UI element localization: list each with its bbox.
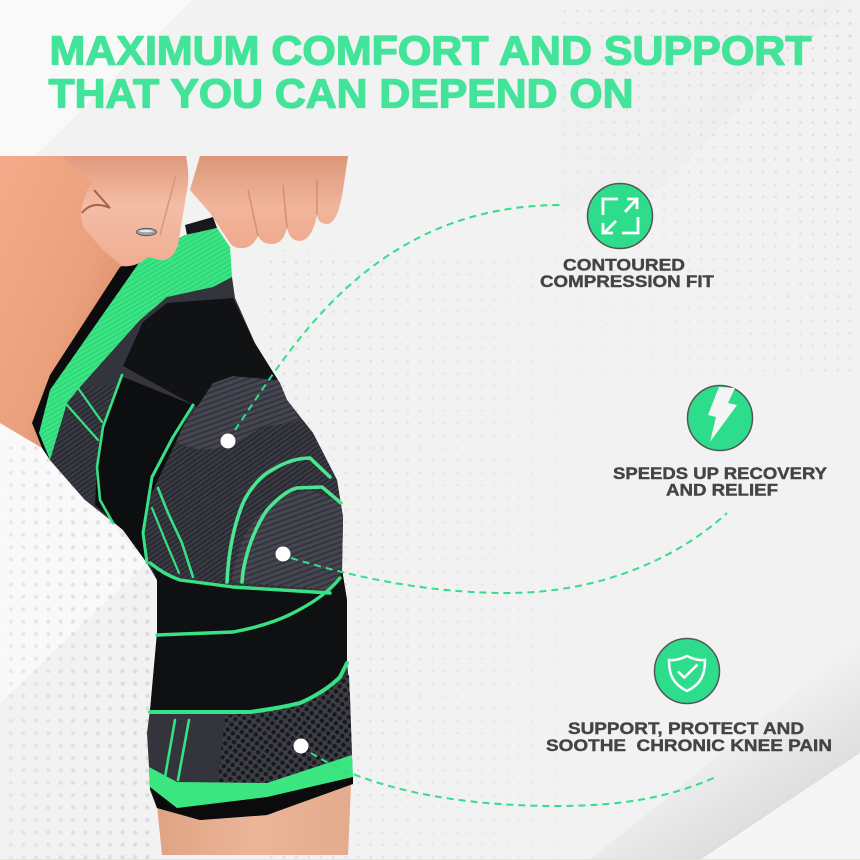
calf skin bbox=[157, 785, 351, 855]
black edge at top of cuff bbox=[185, 217, 217, 235]
photo: knee brace on leg bbox=[0, 156, 360, 855]
green bottom cuff bbox=[149, 755, 353, 808]
dashed connector: recovery bbox=[291, 513, 727, 593]
label: SPEEDS UP RECOVERY bbox=[613, 465, 827, 483]
striped knee lower bbox=[232, 490, 345, 590]
striped knee top bbox=[173, 376, 300, 450]
ring bbox=[136, 228, 156, 236]
marker dots bbox=[220, 434, 308, 754]
black compression wrap bbox=[150, 563, 347, 712]
label: COMPRESSION FIT bbox=[540, 273, 714, 291]
dashed connector: support bbox=[311, 753, 718, 806]
icon: shield check bbox=[654, 638, 720, 704]
icon: expand arrows bbox=[588, 184, 652, 248]
brace body bbox=[39, 257, 353, 820]
right hand bbox=[190, 156, 348, 248]
dashed connector: compression fit bbox=[235, 205, 562, 430]
left hand bbox=[62, 156, 188, 266]
title: THAT YOU CAN DEPEND ON bbox=[48, 70, 634, 116]
thigh skin bbox=[0, 156, 123, 448]
left side knit bbox=[50, 385, 115, 500]
title: MAXIMUM COMFORT AND SUPPORT bbox=[50, 28, 812, 74]
feature: contoured compression fit bbox=[540, 184, 714, 291]
label: SUPPORT, PROTECT AND bbox=[568, 720, 804, 738]
icon: lightning bolt bbox=[688, 386, 752, 450]
black vertical strap bbox=[95, 377, 193, 563]
bottom black hem bbox=[150, 777, 353, 820]
label: AND RELIEF bbox=[666, 482, 778, 500]
black inner flap bbox=[123, 298, 278, 407]
green straps and lines bbox=[67, 375, 347, 780]
label: CONTOURED bbox=[563, 256, 685, 274]
feature: support and protect bbox=[546, 638, 832, 755]
feature: speeds up recovery bbox=[613, 386, 827, 500]
black edge along thigh bbox=[32, 257, 143, 460]
label: SOOTHE CHRONIC KNEE PAIN bbox=[546, 737, 832, 755]
lower knit panel bbox=[218, 675, 352, 783]
green top cuff bbox=[39, 228, 232, 460]
label bbox=[546, 720, 832, 755]
label bbox=[613, 465, 827, 500]
label bbox=[540, 256, 714, 291]
knit kneecap bbox=[140, 420, 360, 590]
title bbox=[48, 28, 812, 116]
